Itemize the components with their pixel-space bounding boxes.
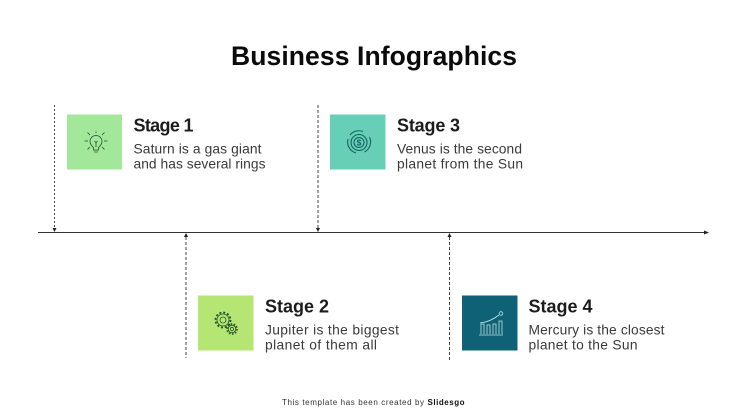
- text: stage 1 description: and has several rings: [134, 156, 266, 172]
- text: stage 4 description: planet to the Sun: [528, 338, 638, 352]
- text: stage 3 description: Venus is the second: [397, 142, 522, 156]
- footer credit: Slidesgo: [428, 398, 465, 407]
- heading: stage 3: Stage 3: [397, 116, 460, 136]
- text: stage 1 description: [134, 142, 266, 172]
- text: stage 3 description: [397, 142, 523, 172]
- icon: light bulb: [67, 114, 122, 170]
- text: stage 4 description: [528, 322, 665, 352]
- icon: gears: [198, 296, 254, 350]
- heading: stage 2: Stage 2: [265, 296, 329, 316]
- text: stage 2 description: planet of them all: [265, 338, 377, 352]
- icon: coin cycle: [330, 114, 386, 170]
- panel: stage 3: [330, 114, 523, 172]
- footer credit: This template has been created by: [282, 398, 424, 407]
- text: stage 3 description: planet from the Sun: [397, 156, 523, 172]
- heading: stage 1: Stage 1: [134, 116, 194, 136]
- text: stage 2 description: Jupiter is the biggest: [265, 322, 399, 338]
- panel: stage 1: [67, 114, 266, 172]
- stage 1 connector arrow: [52, 105, 56, 232]
- text: stage 4 description: Mercury is the closest: [528, 322, 665, 338]
- stage 2 connector arrow: [184, 233, 188, 358]
- panel: stage 2: [198, 296, 399, 352]
- text: stage 2 description: [265, 322, 399, 352]
- icon: growth chart: [462, 296, 518, 350]
- icon: coin cycle: $: [357, 138, 362, 148]
- text: stage 1 description: Saturn is a gas giant: [134, 142, 262, 156]
- heading: stage 4: Stage 4: [528, 296, 592, 316]
- timeline arrow: [38, 230, 709, 234]
- title: Business Infographics: [231, 41, 517, 71]
- panel: stage 4: [462, 296, 665, 352]
- stage 4 connector arrow: [448, 233, 452, 360]
- stage 3 connector arrow: [316, 105, 320, 232]
